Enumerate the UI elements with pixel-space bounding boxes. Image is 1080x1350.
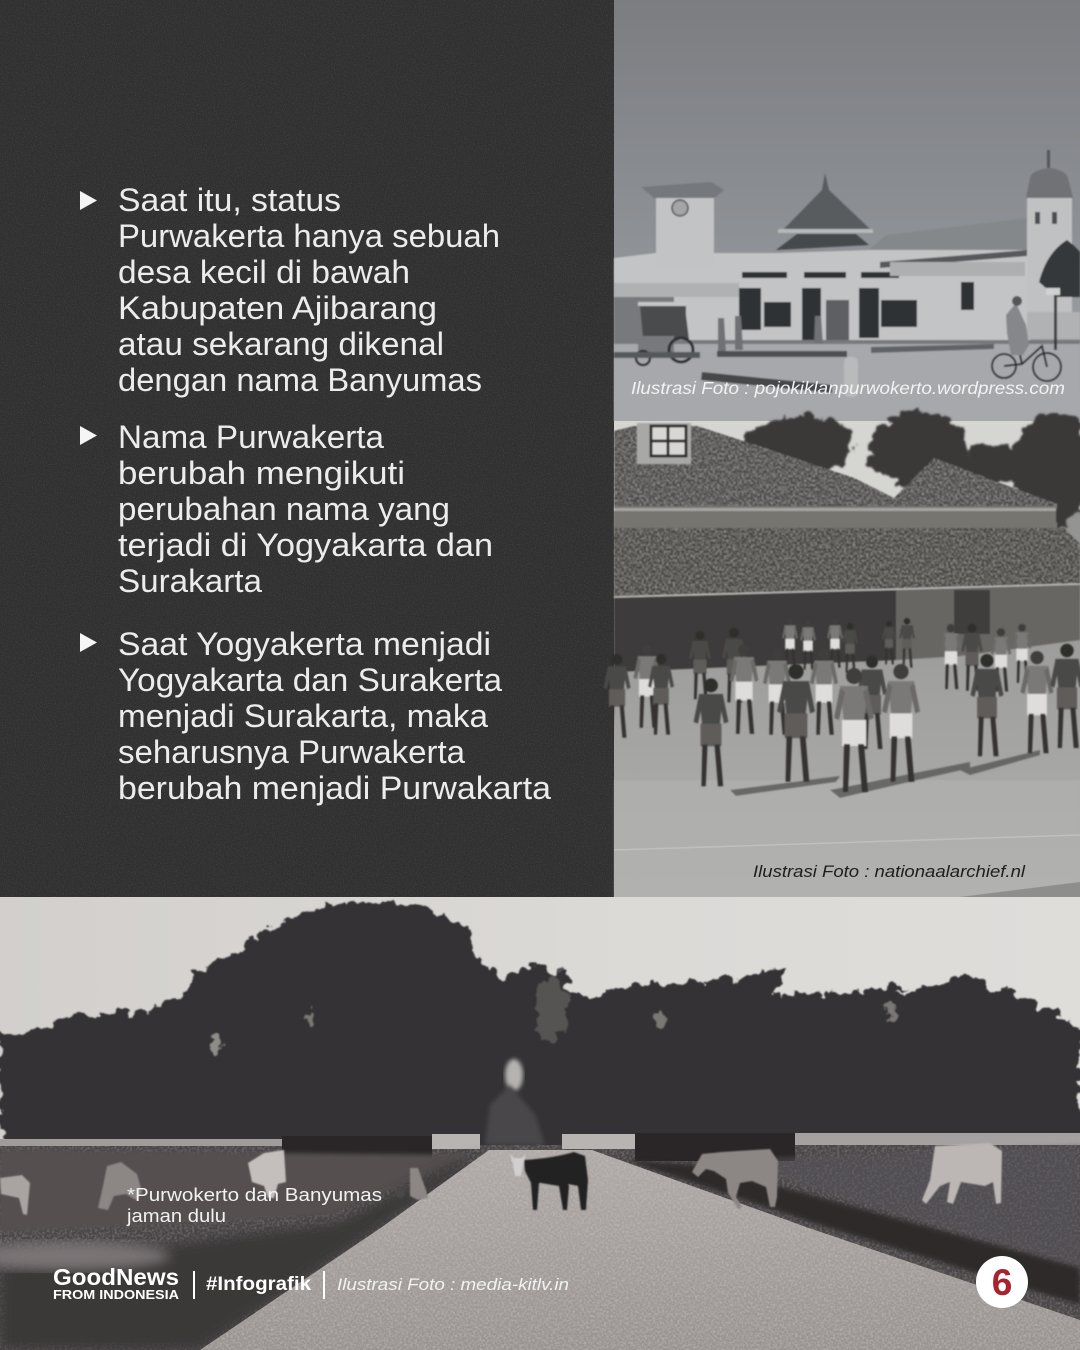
bullet point 1 <box>80 182 500 398</box>
tree <box>1039 240 1080 297</box>
pyramid roof <box>781 173 871 232</box>
bullet point 3: menjadi Surakarta, maka <box>118 698 488 734</box>
fascia <box>614 506 1056 528</box>
photo: rural road with cattle <box>0 897 1080 1350</box>
caption: Purwokerto dan Banyumas: *Purwokerto dan Banyumas <box>127 1185 382 1205</box>
caption: photo credit top: Ilustrasi Foto : pojokiklanpurwokerto.wordpress.com <box>631 378 1065 398</box>
caption: Purwokerto dan Banyumas: jaman dulu <box>126 1206 226 1226</box>
logo: GoodNews from Indonesia: FROM INDONESIA <box>53 1288 179 1302</box>
bullet point 1: atau sekarang dikenal <box>118 326 444 362</box>
bullet point 3: Yogyakarta dan Surakerta <box>118 662 502 698</box>
people <box>718 316 823 352</box>
minaret <box>1027 197 1072 312</box>
left cows <box>98 1162 142 1210</box>
photo: group of men in front of building <box>604 412 1080 897</box>
right field <box>720 1145 1080 1268</box>
caption: photo credit middle: Ilustrasi Foto : nationaalarchief.nl <box>753 862 1026 881</box>
photo: colonial building street scene <box>614 0 1080 421</box>
hashtag: #Infografik <box>206 1274 311 1295</box>
dormer window <box>637 423 691 464</box>
bullet point 2: berubah mengikuti <box>118 455 405 491</box>
bullet point 1: Kabupaten Ajibarang <box>118 290 437 326</box>
crowd <box>604 618 1080 792</box>
people <box>410 1168 428 1200</box>
divider <box>193 1271 195 1299</box>
fence <box>0 1133 1080 1162</box>
bullet point 3: seharusnya Purwakerta <box>118 734 465 770</box>
bullet point 3: Saat Yogyakerta menjadi <box>118 626 491 662</box>
cyclist <box>992 346 1061 381</box>
long roof <box>857 218 1027 263</box>
cow right of centre <box>692 1149 778 1209</box>
clock tower <box>656 197 714 267</box>
tree line <box>0 904 1080 1150</box>
caption: Purwokerto dan Banyumas <box>126 1185 382 1226</box>
bullet point 3: berubah menjadi Purwakarta <box>118 770 551 806</box>
bullet point 1: dengan nama Banyumas <box>118 362 482 398</box>
grazing cow <box>922 1143 1002 1204</box>
photo credit bottom: Ilustrasi Foto : media-kitlv.in <box>337 1275 569 1294</box>
road <box>200 1150 1080 1350</box>
bullet point 1: Purwakerta hanya sebuah <box>118 218 500 254</box>
paving light <box>614 780 1080 897</box>
divider <box>323 1271 325 1299</box>
bullet point 2: terjadi di Yogyakarta dan <box>118 527 493 563</box>
windows and doors <box>739 272 974 342</box>
main building <box>614 250 1030 343</box>
bullet point 2: Nama Purwakerta <box>118 419 384 455</box>
bullet point 2: perubahan nama yang <box>118 491 450 527</box>
lower roof <box>614 528 1080 596</box>
bullet list text <box>80 182 551 806</box>
page number badge: 6 <box>992 1262 1012 1303</box>
ground <box>0 1145 1080 1350</box>
logo: GoodNews from Indonesia <box>53 1264 179 1302</box>
bullet point 1: Saat itu, status <box>118 182 341 218</box>
veranda <box>614 590 896 672</box>
left field <box>0 1150 470 1232</box>
bullet point 2 <box>80 419 493 599</box>
logo: GoodNews from Indonesia: GoodNews <box>53 1264 179 1290</box>
shadows <box>730 750 1040 798</box>
becak <box>636 302 693 365</box>
bullet point 1: desa kecil di bawah <box>118 254 410 290</box>
background trees <box>745 412 1080 528</box>
road markings <box>701 372 832 393</box>
cows <box>0 1143 1002 1215</box>
upper roof <box>614 426 1057 508</box>
bullet point 3 <box>80 626 551 806</box>
central black cow <box>524 1152 588 1210</box>
panel: dark text background <box>0 0 614 897</box>
page number badge <box>976 1256 1028 1308</box>
bullet point 2: Surakarta <box>118 563 262 599</box>
